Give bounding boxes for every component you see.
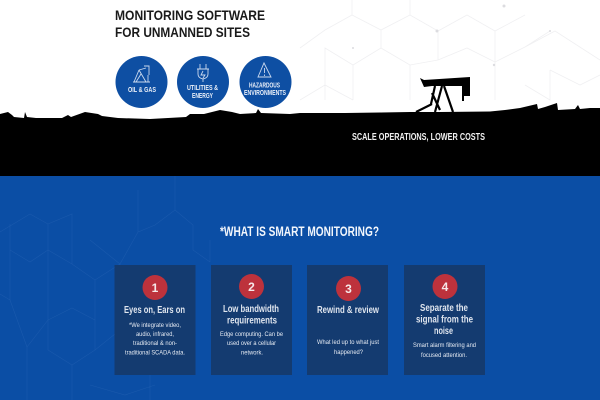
icon: plug bbox=[197, 64, 209, 82]
card 2 text: Edge computing. Can be bbox=[220, 332, 284, 338]
icon: warning triangle bbox=[258, 63, 271, 77]
number badge 3: 3 bbox=[345, 282, 352, 296]
icon: pumpjack silhouette bbox=[416, 77, 470, 112]
badge: utilities & energy: UTILITIES & bbox=[187, 85, 218, 92]
card 4 heading bbox=[416, 303, 473, 337]
card 2 text: network. bbox=[241, 350, 263, 356]
card 2 heading: Low bandwidth bbox=[223, 304, 279, 315]
card 4 text bbox=[413, 343, 476, 359]
card 4 heading: signal from the bbox=[416, 314, 473, 326]
card 2 heading bbox=[223, 304, 279, 326]
card 3 bbox=[307, 265, 388, 375]
card 4 bbox=[404, 265, 485, 375]
card 4 heading: Separate the bbox=[420, 303, 468, 314]
badge: utilities & energy: ENERGY bbox=[192, 93, 213, 100]
card 2 text bbox=[220, 332, 284, 356]
card 1 text: audio, infrared, bbox=[136, 332, 174, 338]
badge: utilities & energy bbox=[177, 56, 229, 108]
number badge 1: 1 bbox=[152, 281, 159, 295]
tagline: SCALE OPERATIONS, LOWER COSTS bbox=[352, 132, 485, 143]
number badge 4: 4 bbox=[442, 280, 449, 294]
badge: oil & gas: OIL & GAS bbox=[128, 87, 156, 94]
badge: hazardous environments: ENVIRONMENTS bbox=[244, 90, 286, 97]
card 3 text: What led up to what just bbox=[317, 340, 379, 346]
badge: hazardous environments: HAZARDOUS bbox=[249, 82, 280, 90]
card 4 heading: noise bbox=[434, 326, 453, 337]
card 4 text: focused attention. bbox=[421, 353, 467, 359]
badge: hazardous environments bbox=[240, 56, 292, 108]
card 2 text: used over a cellular bbox=[227, 341, 276, 347]
card 1 text: *We integrate video, bbox=[129, 323, 181, 329]
title: MONITORING SOFTWARE bbox=[115, 7, 265, 23]
black landscape silhouette bbox=[0, 103, 600, 176]
card 3 heading: Rewind & review bbox=[317, 305, 379, 316]
title: FOR UNMANNED SITES bbox=[115, 24, 250, 40]
card 1 text bbox=[125, 323, 185, 356]
card 2 bbox=[211, 265, 292, 375]
card 4 text: Smart alarm filtering and bbox=[413, 343, 476, 349]
card 3 text bbox=[317, 340, 379, 356]
number badge 2: 2 bbox=[248, 280, 255, 294]
card 1 bbox=[114, 265, 196, 375]
card 1 text: traditional & non- bbox=[133, 341, 177, 347]
card 3 text: happened? bbox=[334, 350, 364, 356]
card 1 text: traditional SCADA data. bbox=[125, 350, 185, 356]
title bbox=[115, 7, 265, 40]
card 2 heading: requirements bbox=[227, 316, 277, 326]
badge: oil & gas bbox=[116, 56, 168, 108]
section heading: *WHAT IS SMART MONITORING? bbox=[220, 224, 379, 239]
card 1 heading: Eyes on, Ears on bbox=[124, 305, 185, 316]
icon: oil pump bbox=[133, 66, 150, 82]
